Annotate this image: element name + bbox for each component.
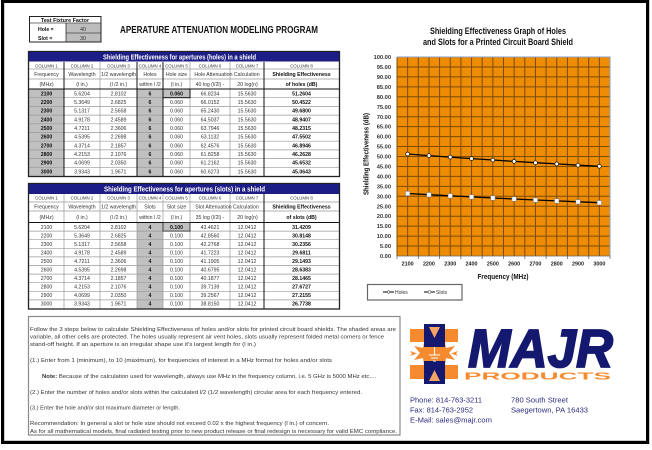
y-axis labels: 40.00: [377, 174, 391, 180]
holes table data rows: 2.0350: [111, 161, 127, 167]
slots table column headers: COLUMN 8: [290, 196, 313, 201]
slots table data rows: 3000: [41, 302, 52, 308]
slots table data rows: 0.100: [170, 233, 183, 239]
y-axis labels: 15.00: [377, 224, 391, 230]
slots table data rows: 41.1905: [201, 259, 219, 265]
x-axis labels: 2400: [466, 262, 478, 268]
slots table column headers: Slots: [144, 204, 156, 210]
contact details: [410, 398, 588, 424]
holes table data rows: 63.1132: [201, 135, 219, 141]
holes table data rows: 2.3606: [111, 126, 127, 132]
holes table data rows: 2200: [41, 100, 52, 106]
y-axis labels: 45.00: [377, 164, 391, 170]
slots table data rows: 0.100: [170, 302, 183, 308]
holes table column headers: COLUMN 7: [236, 64, 259, 68]
y-axis title: Shielding Effectiveness (dB): [362, 113, 370, 195]
slots table column headers: within l /2: [139, 215, 161, 221]
holes table data rows: 6: [149, 117, 152, 123]
holes table data rows: 15.5630: [238, 117, 256, 123]
panel: instructions: [28, 316, 400, 435]
slots table data rows: 0.100: [170, 293, 183, 299]
slots table data rows: 2.0350: [111, 293, 127, 299]
slots table data rows: 4.9178: [74, 250, 90, 256]
slots table column headers: COLUMN 4: [139, 196, 162, 201]
slots table data rows: 12.0412: [238, 259, 256, 265]
slots table data rows: 42.2768: [201, 242, 219, 248]
slots table data rows: 28.1465: [292, 276, 311, 282]
holes table data rows: 15.5630: [238, 169, 256, 175]
slots table data rows: 12.0412: [238, 284, 256, 290]
slots table data rows: 12.0412: [238, 225, 256, 231]
test fixture factor box: 30: [80, 36, 86, 42]
slots table data rows: 2.5658: [111, 242, 127, 248]
slots table data rows: 4: [149, 233, 152, 239]
holes table data rows: 0.060: [170, 152, 183, 158]
panel: instructions: stand-off height. If an aperture is an irregular shape use it's largest length for (l in.): [30, 342, 256, 348]
x-axis labels: [402, 262, 605, 268]
holes table data rows: 0.060: [170, 91, 183, 97]
slots table column headers: Wavelength: [68, 204, 96, 210]
slots table data rows: [41, 225, 311, 308]
slots table data rows: 4: [149, 293, 152, 299]
slots table data rows: 30.2356: [292, 242, 311, 248]
logo: PRODUCTS wordmark: PRODUCTS: [464, 370, 611, 382]
title: APERATURE ATTENUATION MODELING PROGRAM: [120, 25, 318, 36]
slots table data rows: 2600: [41, 267, 52, 273]
x-axis labels: 2800: [551, 262, 563, 268]
test fixture factor box: [30, 16, 101, 42]
contact details: Phone: 814-763-3211: [410, 398, 482, 404]
slots table data rows: 4: [149, 250, 152, 256]
test fixture factor box: 40: [80, 27, 86, 33]
panel: instructions: (3.) Enter the hole and/or slot maximum diameter or length.: [30, 406, 180, 412]
panel: instructions: (1.) Enter from 1 (minimum), to 10 (maximum), for frequencies of interest in a MHz format for holes and/or slots: [30, 358, 332, 364]
holes table data rows: 47.5502: [292, 135, 311, 141]
holes table column headers: Holes: [143, 72, 157, 78]
holes table data rows: 4.0699: [74, 161, 90, 167]
slots table column headers: Frequency: [34, 204, 59, 210]
holes table column headers: within l /2: [139, 82, 161, 88]
holes table data rows: 4.5395: [74, 135, 90, 141]
holes table data rows: 66.0152: [201, 100, 219, 106]
holes table data rows: 0.060: [170, 135, 183, 141]
y-axis labels: 65.00: [377, 125, 391, 131]
y-axis labels: 10.00: [377, 234, 391, 240]
holes table column headers: Hole size: [166, 72, 187, 78]
holes table data rows: 48.9407: [292, 117, 311, 123]
slots table data rows: 40.1877: [201, 276, 219, 282]
holes table column headers: 1/2 wavelength: [101, 72, 136, 78]
panel: instructions: As for all mathematical models, final radiated testing prior to new product release or final redesign is necessary for valid EMC compliance.: [30, 429, 397, 435]
holes table data rows: 2600: [41, 135, 52, 141]
holes table data rows: 48.2315: [292, 126, 311, 132]
holes table data rows: 5.1317: [74, 109, 90, 115]
x-axis labels: 3000: [593, 262, 605, 268]
holes table data rows: 6: [149, 100, 152, 106]
slots table column headers: (l in.): [76, 215, 88, 221]
y-axis labels: 20.00: [377, 214, 391, 220]
holes table data rows: 15.5630: [238, 143, 256, 149]
slots table data rows: 39.2567: [201, 293, 219, 299]
holes table column headers: Frequency: [34, 72, 59, 78]
holes table column headers: of holes (dB): [286, 82, 318, 88]
y-axis labels: 50.00: [377, 154, 391, 160]
holes table data rows: 5.3649: [74, 100, 90, 106]
holes table column headers: Wavelength: [68, 72, 96, 78]
slots table column headers: 20 log(n): [237, 215, 258, 221]
x-axis labels: 2100: [402, 262, 414, 268]
y-axis labels: 75.00: [377, 105, 391, 111]
y-axis labels: 35.00: [377, 184, 391, 190]
slots table title bar: Shielding Effectiveness for apertures (slots) in a shield: [104, 185, 265, 194]
holes table data rows: 6: [149, 91, 152, 97]
holes table data rows: 45.6532: [292, 161, 311, 167]
holes table data rows: 15.5630: [238, 100, 256, 106]
y-axis labels: [374, 55, 391, 260]
slots table data rows: 3.9343: [74, 302, 90, 308]
x-axis labels: 2700: [529, 262, 541, 268]
y-axis labels: 5.00: [380, 244, 391, 250]
slots table data rows: 0.100: [170, 284, 183, 290]
holes table column headers: [34, 64, 331, 88]
holes table data rows: 15.5630: [238, 126, 256, 132]
slots table data rows: 0.100: [170, 242, 183, 248]
slots table data rows: 29.6811: [292, 250, 311, 256]
slots table column headers: COLUMN 6: [199, 196, 222, 201]
slots table data rows: 4.2153: [74, 284, 90, 290]
slots table data rows: 39.7139: [201, 284, 219, 290]
slots table data rows: 0.100: [170, 225, 183, 231]
slots table data rows: 4: [149, 259, 152, 265]
slots table data rows: 12.0412: [238, 267, 256, 273]
slots table data rows: 26.7738: [292, 302, 311, 308]
contact details: 780 South Street: [511, 398, 568, 404]
holes table data rows: 15.5630: [238, 91, 256, 97]
panel: slots table: [28, 184, 340, 309]
slots table data rows: 2.4589: [111, 250, 127, 256]
slots table data rows: 2200: [41, 233, 52, 239]
holes table data rows: 0.060: [170, 109, 183, 115]
holes table data rows: 2700: [41, 143, 52, 149]
slots table data rows: 12.0412: [238, 242, 256, 248]
slots table data rows: 12.0412: [238, 250, 256, 256]
holes table data rows: 3000: [41, 169, 52, 175]
slots table data rows: 12.0412: [238, 276, 256, 282]
holes table data rows: 6: [149, 143, 152, 149]
slots table data rows: 0.100: [170, 276, 183, 282]
holes table data rows: 15.5630: [238, 135, 256, 141]
slots table data rows: 4: [149, 276, 152, 282]
slots table data rows: 4: [149, 267, 152, 273]
holes table column headers: Shielding Effectiveness: [272, 72, 331, 78]
holes table data rows: 50.4522: [292, 100, 311, 106]
holes table data rows: 6: [149, 161, 152, 167]
holes table data rows: 4.3714: [74, 143, 90, 149]
holes table data rows: 2.2698: [111, 135, 127, 141]
holes table column headers: 20 log(n): [237, 82, 258, 88]
test fixture factor box: Test Fixture Factor: [41, 18, 90, 24]
y-axis labels: 60.00: [377, 135, 391, 141]
slots series: [405, 191, 602, 205]
holes table column headers: (MHz): [39, 82, 54, 88]
slots table column headers: Slot Attenuation Calculation: [195, 204, 259, 210]
x-axis labels: 2900: [572, 262, 584, 268]
holes table column headers: COLUMN 5: [165, 64, 188, 68]
slots table data rows: 30.8148: [292, 233, 311, 239]
chart legend: Holes: [395, 290, 408, 296]
holes table column headers: 40 log (l/2l) -: [196, 82, 225, 88]
slots table column headers: Slot size: [167, 204, 186, 210]
line chart: shielding effectiveness: [362, 55, 610, 300]
y-axis labels: 30.00: [377, 194, 391, 200]
slots table data rows: 40.6795: [201, 267, 219, 273]
holes table data rows: 2.1076: [111, 152, 127, 158]
y-axis labels: 70.00: [377, 115, 391, 121]
slots table data rows: 4.5395: [74, 267, 90, 273]
holes table data rows: 65.2430: [201, 109, 219, 115]
holes table column headers: COLUMN 2: [71, 64, 94, 68]
slots table data rows: 4: [149, 302, 152, 308]
holes table column headers: Hole Attenuation Calculation: [194, 72, 260, 78]
holes table data rows: 3.9343: [74, 169, 90, 175]
holes table data rows: 0.060: [170, 169, 183, 175]
slots table data rows: 5.6204: [74, 225, 90, 231]
slots table data rows: 2.2698: [111, 267, 127, 273]
holes table column headers: COLUMN 4: [139, 64, 162, 68]
holes table data rows: 4.2153: [74, 152, 90, 158]
holes table data rows: [41, 91, 311, 175]
slots table data rows: 2900: [41, 293, 52, 299]
holes table data rows: 0.060: [170, 100, 183, 106]
y-axis labels: 0.00: [380, 254, 391, 260]
contact details: Saegertown, PA 16433: [511, 408, 588, 414]
holes table data rows: 45.0643: [292, 169, 311, 175]
slots table column headers: 1/2 wavelength: [101, 204, 136, 210]
slots table data rows: 2300: [41, 242, 52, 248]
slots table data rows: 4.0699: [74, 293, 90, 299]
holes table data rows: 62.4576: [201, 143, 219, 149]
holes table data rows: 51.2604: [292, 91, 311, 97]
slots table data rows: 2.3606: [111, 259, 127, 265]
contact details: Fax: 814-763-2952: [410, 408, 473, 414]
chart title: [423, 26, 573, 47]
slots table column headers: (l in.): [171, 215, 183, 221]
panel: instructions: Follow the 3 steps below to calculate Shielding Effectiveness of holes and/or slots for printed circuit board shields. The shaded areas are: [30, 327, 396, 333]
slots table column headers: COLUMN 2: [71, 196, 94, 201]
holes table data rows: 64.5037: [201, 117, 219, 123]
slots table data rows: 2.1076: [111, 284, 127, 290]
x-axis labels: 2300: [444, 262, 456, 268]
slots table data rows: 2400: [41, 250, 52, 256]
holes table title bar: [29, 52, 339, 62]
holes table data rows: 46.8946: [292, 143, 311, 149]
panel: instructions: variable, all other cells are protected. The holes usually represent air vent holes, slots usually represent folded metal corners or fence: [30, 334, 384, 340]
y-axis labels: 100.00: [374, 55, 391, 61]
slots table column headers: [34, 196, 331, 221]
slots table column headers: (MHz): [39, 215, 54, 221]
slots table column headers: COLUMN 1: [35, 196, 58, 201]
holes table data rows: 5.6204: [74, 91, 90, 97]
panel: instructions: (2.) Enter the number of holes and/or slots within the calculated l/2 (1/2 wavelength) circular area for each frequency entered.: [30, 390, 362, 396]
slots table data rows: 2.1857: [111, 276, 127, 282]
slots table column headers: 35 log (l/2l) -: [196, 215, 225, 221]
holes table column headers: (l in.): [171, 82, 183, 88]
holes table data rows: 15.5630: [238, 109, 256, 115]
slots table data rows: 12.0412: [238, 233, 256, 239]
slots table data rows: 4: [149, 242, 152, 248]
slots table data rows: 2.6825: [111, 233, 127, 239]
holes table data rows: 0.060: [170, 161, 183, 167]
holes table data rows: 6: [149, 152, 152, 158]
holes table column headers: COLUMN 8: [290, 64, 313, 68]
x-axis title: Frequency (MHz): [478, 272, 529, 281]
slots table data rows: 2100: [41, 225, 52, 231]
holes series: [406, 152, 601, 168]
slots table data rows: 4: [149, 225, 152, 231]
holes table data rows: 49.6800: [292, 109, 311, 115]
slots table data rows: 1.9671: [111, 302, 127, 308]
holes table data rows: 15.5630: [238, 161, 256, 167]
slots table data rows: 2800: [41, 284, 52, 290]
slots table data rows: 0.100: [170, 267, 183, 273]
slots table data rows: 38.8150: [201, 302, 219, 308]
slots table column headers: COLUMN 7: [236, 196, 259, 201]
chart legend: [368, 284, 462, 300]
holes table data rows: 4.9178: [74, 117, 90, 123]
slots table data rows: 2500: [41, 259, 52, 265]
holes table data rows: 46.2628: [292, 152, 311, 158]
holes table data rows: 61.8258: [201, 152, 219, 158]
holes table data rows: 2500: [41, 126, 52, 132]
slots table data rows: 31.4209: [292, 225, 311, 231]
holes table data rows: 61.2162: [201, 161, 219, 167]
slots table data rows: 12.0412: [238, 293, 256, 299]
holes table column headers: COLUMN 3: [107, 64, 130, 68]
holes table column headers: COLUMN 1: [35, 64, 58, 68]
x-axis labels: 2200: [423, 262, 435, 268]
slots table data rows: 5.3649: [74, 233, 90, 239]
holes table data rows: 2800: [41, 152, 52, 158]
slots table data rows: 2.8102: [111, 225, 127, 231]
y-axis labels: 85.00: [377, 85, 391, 91]
slots table data rows: 12.0412: [238, 302, 256, 308]
test fixture factor box: Slot =: [38, 36, 52, 42]
slots table column headers: COLUMN 5: [165, 196, 188, 201]
holes table data rows: 2.1857: [111, 143, 127, 149]
test fixture factor box: Hole =: [38, 27, 54, 33]
slots table column headers: COLUMN 3: [107, 196, 130, 201]
panel: instructions: Recommendation: In general a slot or hole size should not exceed 0.02 x the highest frequency (l in.) of concern.: [30, 421, 329, 427]
panel: holes table: [28, 52, 340, 176]
holes table column headers: (l in.): [76, 82, 88, 88]
slots table column headers: of slots (dB): [286, 215, 317, 221]
holes table data rows: 6: [149, 169, 152, 175]
holes table data rows: 4.7211: [74, 126, 90, 132]
chart title: and Slots for a Printed Circuit Board Shield: [423, 37, 573, 47]
slots table data rows: 4: [149, 284, 152, 290]
x-axis labels: 2500: [487, 262, 499, 268]
y-axis labels: 25.00: [377, 204, 391, 210]
holes table data rows: 6: [149, 126, 152, 132]
holes table data rows: 66.8234: [201, 91, 219, 97]
chart title: Shielding Effectiveness Graph of Holes: [430, 26, 566, 36]
holes table data rows: 6: [149, 109, 152, 115]
holes table data rows: 15.5630: [238, 152, 256, 158]
slots table data rows: 28.6383: [292, 267, 311, 273]
slots table data rows: 0.100: [170, 259, 183, 265]
holes table data rows: 2100: [41, 91, 52, 97]
holes table data rows: 0.060: [170, 126, 183, 132]
slots table column headers: Shielding Effectiveness: [272, 204, 331, 210]
contact details: E-Mail: sales@majr.com: [410, 418, 492, 424]
holes table data rows: 2.5658: [111, 109, 127, 115]
slots table data rows: 27.2155: [292, 293, 311, 299]
slots table data rows: 43.4621: [201, 225, 219, 231]
holes table data rows: 2.6825: [111, 100, 127, 106]
holes table column headers: (l /2 in.): [110, 82, 127, 88]
y-axis labels: 90.00: [377, 75, 391, 81]
slots table title bar: [29, 184, 339, 194]
slots table data rows: 5.1317: [74, 242, 90, 248]
x-axis labels: 2600: [508, 262, 520, 268]
holes table data rows: 0.060: [170, 117, 183, 123]
holes table data rows: 2900: [41, 161, 52, 167]
holes table data rows: 2.8102: [111, 91, 127, 97]
holes table data rows: 6: [149, 135, 152, 141]
slots table data rows: 42.8560: [201, 233, 219, 239]
slots table data rows: 4.3714: [74, 276, 90, 282]
holes table data rows: 2.4589: [111, 117, 127, 123]
slots table data rows: 4.7211: [74, 259, 90, 265]
holes table data rows: 0.060: [170, 143, 183, 149]
slots table data rows: 27.6727: [292, 284, 311, 290]
holes table data rows: 63.7946: [201, 126, 219, 132]
slots table data rows: 2700: [41, 276, 52, 282]
slots table data rows: 0.100: [170, 250, 183, 256]
slots table data rows: 29.1493: [292, 259, 311, 265]
holes table data rows: 2300: [41, 109, 52, 115]
logo: MAJR wordmark: MAJR: [468, 319, 613, 379]
y-axis labels: 80.00: [377, 95, 391, 101]
panel: instructions: Note: Because of the calculation used for wavelength, always use MHz in the frequency column, i.e. 5 GHz is 5000 MHz etc....: [42, 374, 376, 380]
slots table column headers: (l /2 in.): [110, 215, 127, 221]
logo: MAJR emblem: [410, 324, 458, 384]
holes table data rows: 60.6273: [201, 169, 219, 175]
holes table title bar: Shielding Effectiveness for apertures (holes) in a shield: [103, 52, 256, 61]
holes table column headers: COLUMN 6: [199, 64, 222, 68]
holes table data rows: 1.9671: [111, 169, 127, 175]
slots table data rows: 41.7223: [201, 250, 219, 256]
y-axis labels: 55.00: [377, 145, 391, 151]
chart legend: Slots: [436, 290, 448, 296]
y-axis labels: 95.00: [377, 65, 391, 71]
holes table data rows: 2400: [41, 117, 52, 123]
